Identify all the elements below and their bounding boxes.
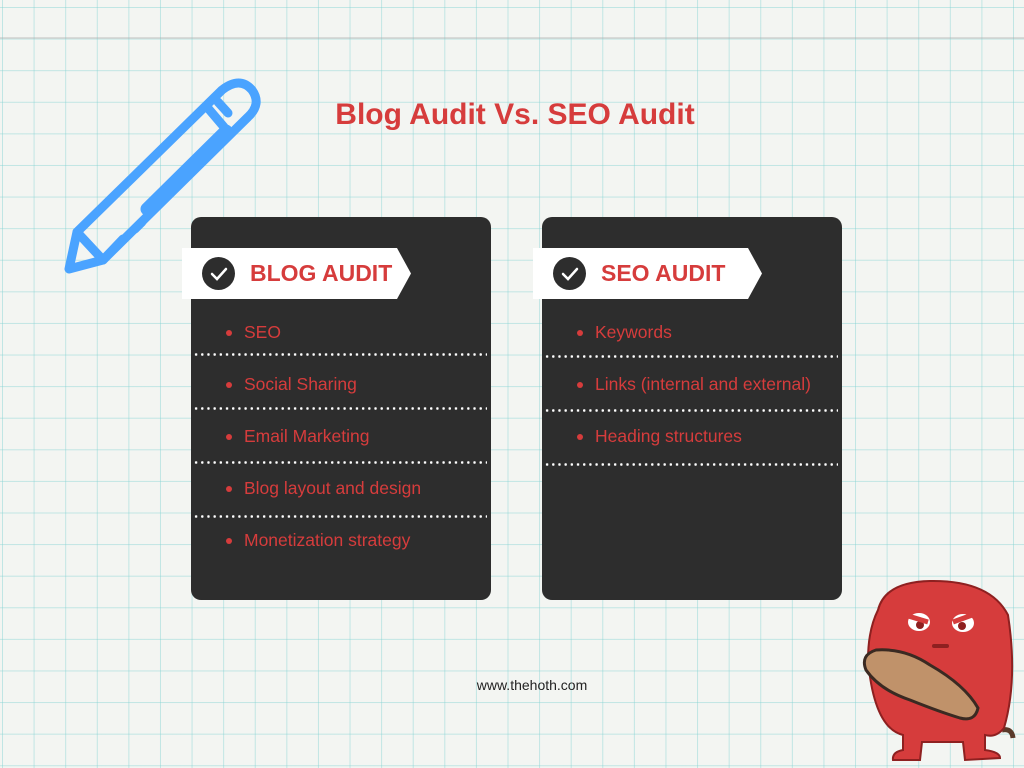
banner: seo audit xyxy=(533,248,762,299)
paper fold line xyxy=(0,37,1024,39)
panel: seo audit xyxy=(542,217,842,600)
panel: blog audit xyxy=(191,217,491,600)
banner: blog audit: BLOG AUDIT xyxy=(250,260,392,286)
icon: red monster xyxy=(862,580,1016,761)
list: seo items: Heading structures xyxy=(595,426,742,446)
footer url: www.thehoth.com xyxy=(477,677,587,693)
icon: pencil xyxy=(64,78,261,274)
list: seo items xyxy=(546,322,838,466)
list: blog items: Monetization strategy xyxy=(244,530,410,550)
list: blog items: Blog layout and design xyxy=(244,478,421,498)
list: blog items: Email Marketing xyxy=(244,426,369,446)
list: blog items: Social Sharing xyxy=(244,374,357,394)
list: seo items: Links (internal and external) xyxy=(595,374,811,394)
banner: blog audit xyxy=(182,248,411,299)
title: Blog Audit Vs. SEO Audit xyxy=(335,98,695,131)
list: blog items xyxy=(194,322,487,550)
banner: seo audit: SEO AUDIT xyxy=(601,260,725,286)
list: blog items: SEO xyxy=(244,322,281,342)
list: seo items: Keywords xyxy=(595,322,672,342)
